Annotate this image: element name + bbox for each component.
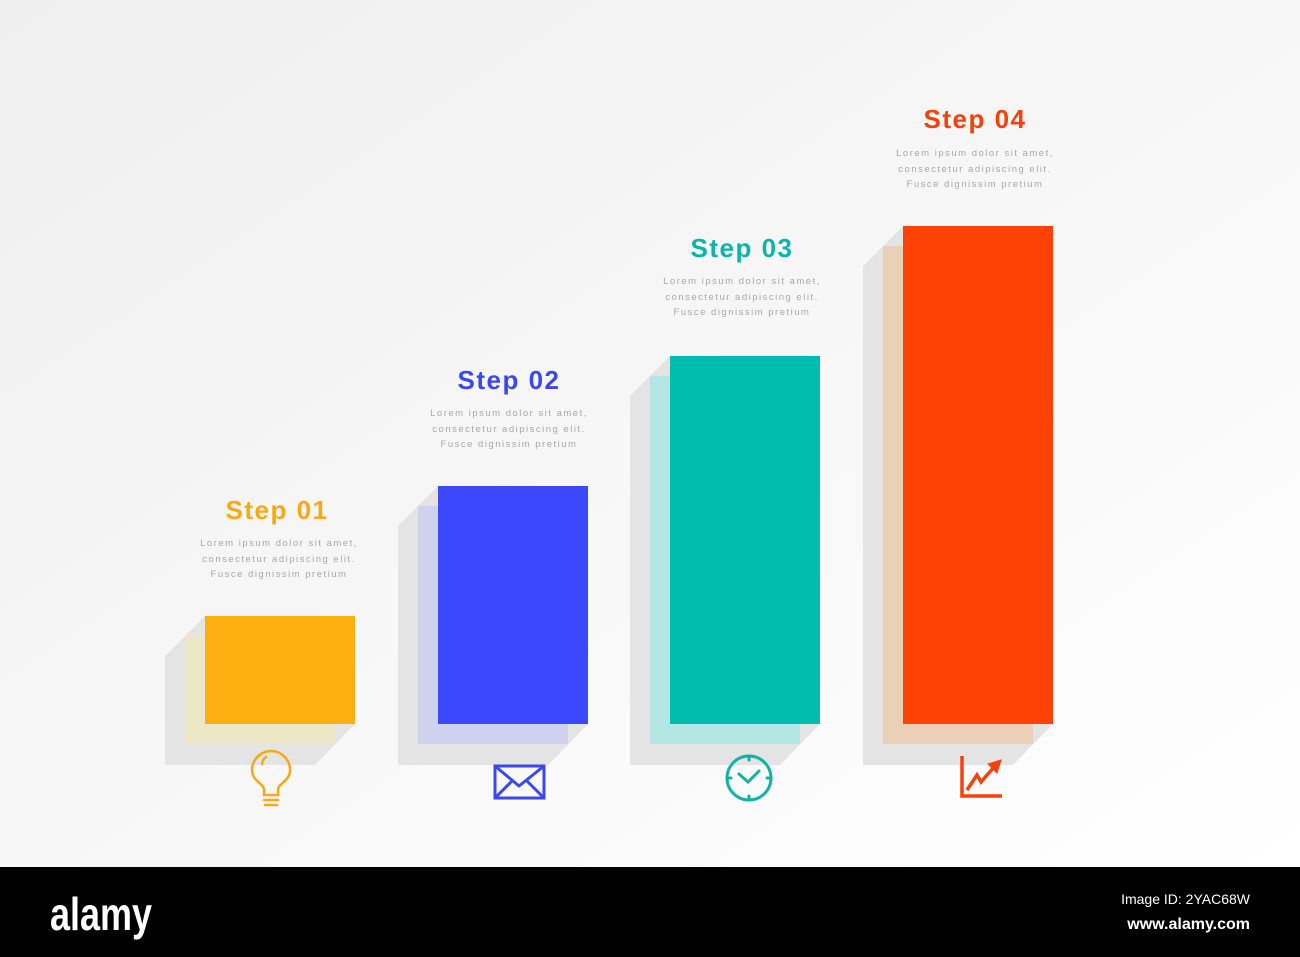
text: step 01: consectetur adipiscing elit. [202, 554, 356, 565]
bar: step 03 [630, 356, 820, 765]
footer band: www.alamy.com [1126, 916, 1250, 933]
text: step 04: Step 04 [924, 104, 1026, 134]
text: step 03: Lorem ipsum dolor sit amet, [663, 276, 821, 287]
text: step 02 [430, 365, 588, 450]
text: step 01: Step 01 [226, 495, 328, 525]
icon: envelope [495, 766, 544, 798]
text: step 02: consectetur adipiscing elit. [432, 424, 586, 435]
text: step 04: Fusce dignissim pretium [907, 179, 1043, 190]
text: step 03: consectetur adipiscing elit. [665, 292, 819, 303]
text: step 01: Fusce dignissim pretium [211, 569, 347, 580]
icon: light bulb [252, 751, 290, 805]
bar: step 02 [398, 486, 588, 765]
text: step 04: consectetur adipiscing elit. [898, 164, 1052, 175]
text: step 04: Lorem ipsum dolor sit amet, [896, 148, 1054, 159]
text: step 04 [896, 104, 1054, 190]
bar: step 04 [863, 226, 1053, 765]
text: step 03: Step 03 [690, 233, 794, 263]
footer band: Image ID: 2YAC68W [1121, 891, 1251, 907]
text: step 03: Fusce dignissim pretium [674, 307, 810, 318]
icon: clock [727, 756, 771, 800]
text: step 01: Lorem ipsum dolor sit amet, [200, 538, 358, 549]
text: step 03 [663, 233, 821, 318]
footer band [0, 867, 1300, 957]
icon: growth chart [962, 756, 1002, 796]
text: step 02: Lorem ipsum dolor sit amet, [430, 408, 588, 419]
footer band: alamy [50, 888, 152, 940]
text: step 02: Fusce dignissim pretium [441, 439, 577, 450]
bar: step 01 [165, 616, 355, 765]
text: step 01 [200, 495, 358, 580]
text: step 02: Step 02 [458, 365, 560, 395]
